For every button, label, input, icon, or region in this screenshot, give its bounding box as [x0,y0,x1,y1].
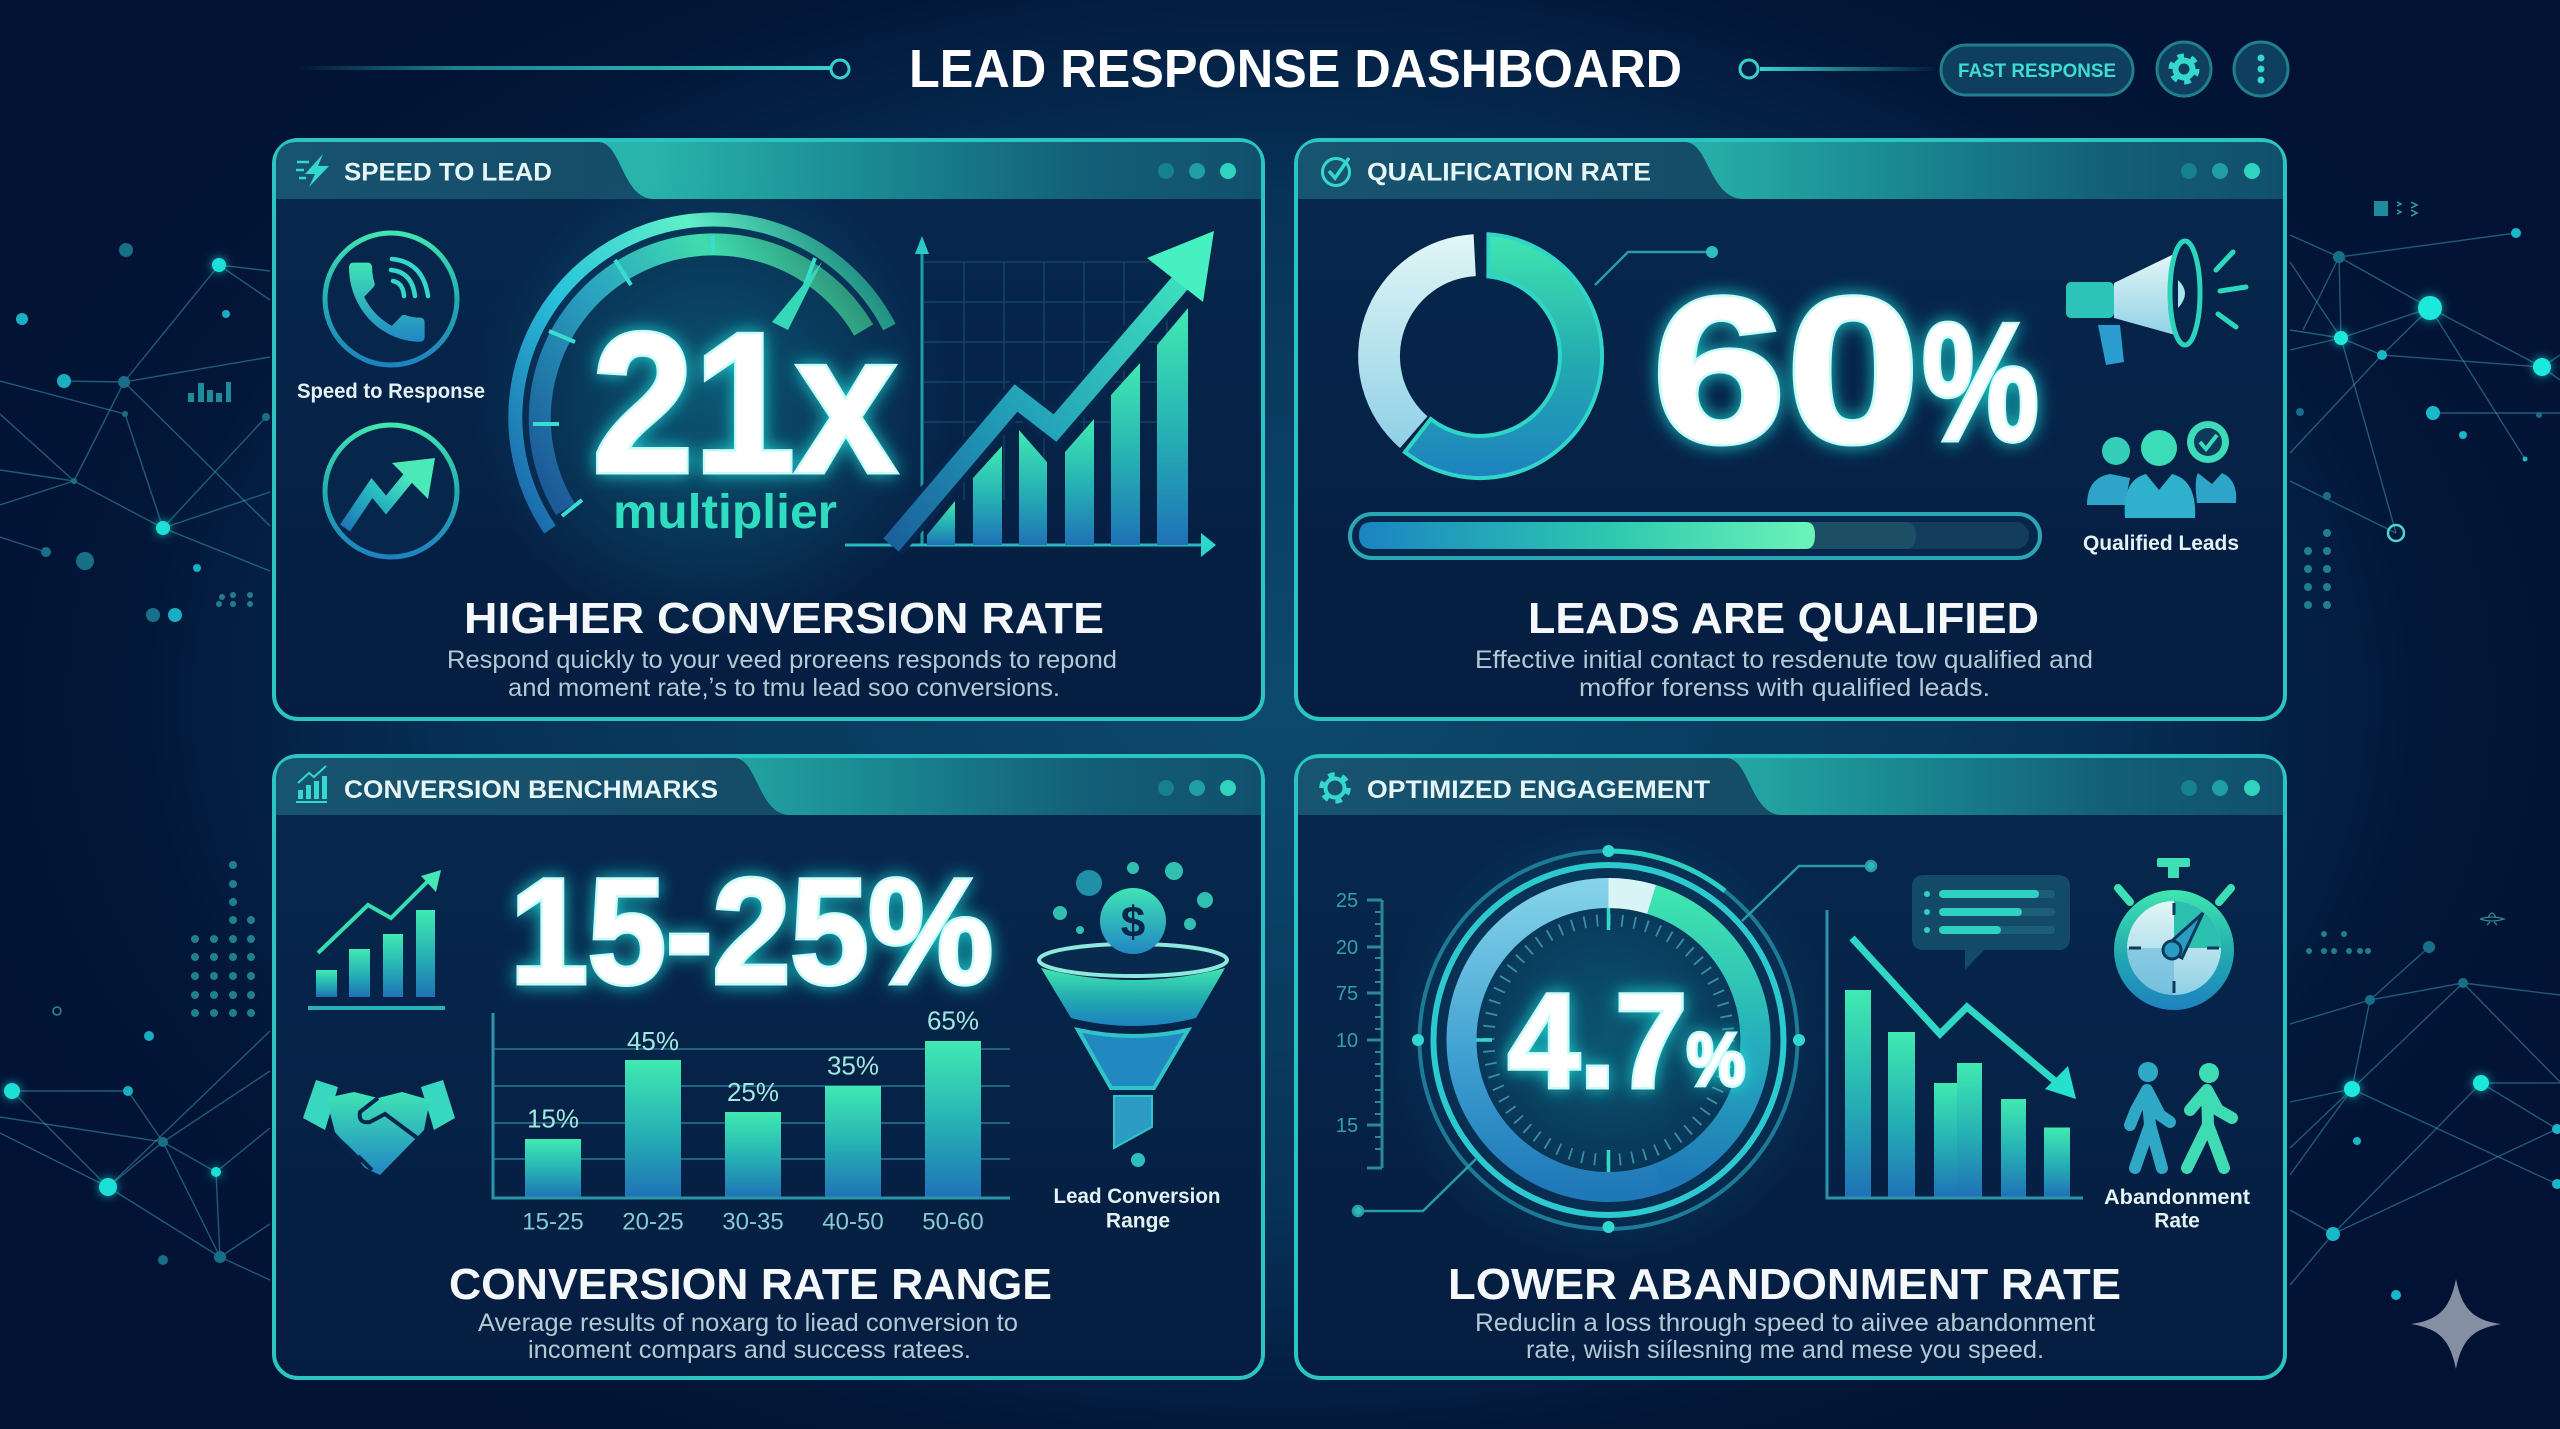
panel title: OPTIMIZED ENGAGEMENT [1367,776,1710,804]
axis labels: 40-50 [822,1209,884,1236]
icon: rising arrow circle [325,425,457,557]
description: Average results of noxarg to lіead conversion to [478,1309,1018,1337]
panel: qualification rate [1296,140,2285,719]
panel frame [274,140,1263,719]
gauge [473,160,953,640]
progress bar [1350,514,2040,558]
value: 60% [1652,255,2039,487]
falling arrow [1852,938,2076,1099]
icon: phone [325,233,457,365]
label: speed to response: Speed to Response [297,380,485,403]
bar chart [493,1006,1010,1236]
panel header strip [276,758,1261,815]
network decoration left [0,243,270,1280]
chat bubble [1912,875,2070,970]
description [1475,646,2093,702]
panel title: SPEED TO LEAD [344,158,552,186]
icon: menu button [2234,42,2288,96]
axis labels: 30-35 [722,1209,784,1236]
panel title: CONVERSION BENCHMARKS [344,776,718,804]
bar values [527,1006,979,1134]
icon: stopwatch [2114,858,2234,1010]
label: lead conversion range: Range [1106,1210,1170,1232]
description: Reduclin a loss through speed to aiivee abandonment [1475,1309,2095,1337]
scale axis [1336,890,1382,1168]
heading: LOWER ABANDONMENT RATE [1448,1260,2121,1309]
panel header strip [1298,758,2283,815]
description [447,646,1117,702]
scale axis: 75 [1336,983,1358,1005]
badge: fast response: FAST RESPONSE [1958,61,2116,82]
value: 4.7%: 4.7 [1508,967,1687,1116]
value: 21x: 21x [592,292,897,515]
label: multiplier: multiplier [613,486,837,539]
description [1475,1309,2095,1364]
header bar [294,39,2288,99]
badge: fast response [1941,45,2133,95]
panel: optimized engagement [1296,756,2285,1378]
window dots [2181,780,2260,796]
description: Respond quickly to your veed proreens responds to repond [447,646,1117,674]
icon: check circle [1322,158,1350,186]
gauge ring [1384,815,1834,1265]
callout lines [1353,861,1876,1216]
growth chart [845,231,1216,557]
icon: handshake [303,1080,455,1175]
scale axis: 10 [1336,1030,1358,1052]
icon: lightning bolt [296,154,329,187]
label: lead conversion range: Lead Conversion [1054,1185,1220,1208]
bar values: 15% [527,1104,579,1134]
panel frame [274,756,1263,1378]
heading: LEADS ARE QUALIFIED [1528,594,2039,643]
axis labels: 20-25 [622,1209,684,1236]
description: rate, wiish siílesning me and mese you speed. [1526,1336,2044,1364]
scale axis: 20 [1336,937,1358,959]
icon: growth bars [308,870,445,1010]
icon: funnel: $ [1121,898,1145,947]
callout line [1595,246,1718,285]
panel title: QUALIFICATION RATE [1367,158,1651,186]
bar values: 45% [627,1026,679,1056]
bar chart: abandonment [1827,910,2083,1198]
scale axis: 25 [1336,890,1358,912]
icon: qualified people [2087,421,2236,518]
icon: walking people [2130,1062,2232,1168]
panel header strip [1298,142,2283,199]
panel: conversion benchmarks [274,756,1263,1378]
value: 60%: % [1922,288,2039,476]
description: incoment compars and success ratees. [528,1336,971,1364]
label: abandonment rate: Abandonment [2104,1186,2250,1209]
bars [525,1041,981,1198]
window dots [2181,163,2260,179]
value: 60%: 60 [1652,255,1920,487]
label: abandonment rate [2104,1186,2250,1232]
icon: funnel [1039,862,1227,1167]
heading: HIGHER CONVERSION RATE [464,594,1104,643]
description: Effective initial contact to resdenute tow qualified and [1475,646,2093,674]
icon: settings button [2157,42,2211,96]
heading: CONVERSION RATE RANGE [449,1260,1052,1309]
scale axis: 15 [1336,1115,1358,1137]
panel header strip [276,142,1261,199]
window dots [1158,163,1236,179]
axis labels [522,1209,984,1236]
icon: gear [1322,774,1348,802]
description: moffor forenss with qualified leads. [1579,674,1990,702]
window dots [1158,780,1236,796]
title: LEAD RESPONSE DASHBOARD [909,39,1682,99]
label: qualified leads: Qualified Leads [2083,532,2239,555]
icon: mini chart [296,766,327,803]
axis labels: 15-25 [522,1209,584,1236]
label: abandonment rate: Rate [2154,1210,2200,1232]
bar values: 35% [827,1050,879,1080]
network decoration right [2290,201,2560,1300]
icon: megaphone [2066,241,2246,365]
panel frame [1296,756,2285,1378]
header line right [1740,60,1940,78]
value: 4.7%: % [1687,1018,1745,1101]
donut chart [1358,234,1602,478]
description [478,1309,1018,1364]
panel: speed to lead [274,140,1263,719]
label: lead conversion range [1054,1185,1220,1232]
icon: sparkle watermark [2411,1279,2501,1369]
bar values: 65% [927,1006,979,1036]
description: and moment rate,ʼs to tmu lead soo conversions. [508,674,1060,702]
header line left [294,60,849,78]
axis labels: 50-60 [922,1209,984,1236]
panel frame [1296,140,2285,719]
value: 15-25%: 15-25% [510,847,993,1015]
bar values: 25% [727,1077,779,1107]
